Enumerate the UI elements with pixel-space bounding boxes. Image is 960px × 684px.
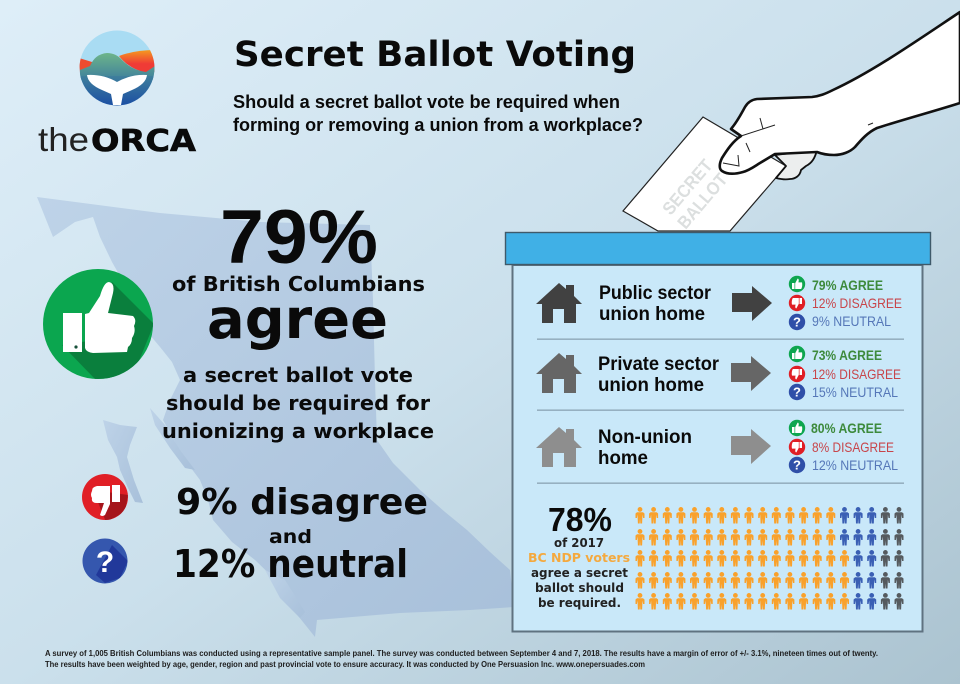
ballot box lid — [506, 232, 930, 264]
label: union home — [598, 375, 704, 396]
label: home — [598, 448, 648, 469]
subtitle question: forming or removing a union from a workplace? — [233, 115, 643, 135]
row: public sector union home — [536, 276, 902, 330]
row: private sector union home — [536, 346, 901, 400]
arrow — [731, 356, 771, 391]
secret ballot statement — [162, 363, 434, 443]
title: Secret Ballot Voting — [234, 35, 636, 75]
logo emblem — [79, 30, 155, 106]
logo: the ORCA — [38, 30, 197, 159]
agree: agree — [207, 287, 388, 351]
subtitle question: Should a secret ballot vote be required when — [233, 92, 620, 112]
secret ballot statement: should be required for — [166, 391, 430, 415]
disagree stat: 9% disagree — [176, 482, 428, 523]
neutral stat: 12% neutral — [173, 542, 408, 586]
footnote: The results have been weighted by age, gender, region and past provincial vote to ensure accuracy. It was conducted by One Persuasion Inc. www.onepersuades.com — [45, 660, 645, 669]
results: 9% NEUTRAL — [812, 313, 891, 329]
results: 80% AGREE — [811, 420, 882, 436]
ballot paper text — [658, 155, 731, 233]
arm and palm — [720, 12, 960, 174]
results: 73% AGREE — [812, 347, 882, 363]
label — [599, 283, 712, 325]
secret ballot statement: a secret ballot vote — [183, 363, 413, 387]
results: 8% DISAGREE — [812, 439, 894, 455]
label: Private sector — [598, 354, 720, 375]
results — [789, 420, 898, 473]
gray people — [881, 507, 904, 610]
and: and — [269, 526, 312, 548]
big percentage: 79% — [220, 195, 378, 280]
results: 15% NEUTRAL — [812, 384, 898, 400]
thumbs up icon — [43, 269, 154, 379]
ballot paper text: SECRET — [658, 155, 716, 219]
finger and thumb details — [723, 118, 873, 166]
ballot paper — [623, 117, 786, 233]
NDP voters stat: ballot should — [535, 580, 624, 595]
row: non-union home — [536, 420, 898, 473]
blue people — [840, 507, 876, 610]
lower fingers — [775, 150, 817, 179]
logo: the ORCA: ORCA — [91, 124, 197, 159]
icon: house — [536, 427, 582, 467]
footnote — [45, 649, 878, 669]
results: 12% NEUTRAL — [812, 457, 898, 473]
icon: house — [536, 353, 582, 393]
question mark icon: ? — [96, 546, 114, 579]
results: 12% DISAGREE — [812, 295, 902, 311]
label — [598, 354, 720, 396]
ballot box body — [512, 265, 922, 632]
secret ballot statement: unionizing a workplace — [162, 419, 434, 443]
NDP voters stat: BC NDP voters — [528, 550, 630, 565]
thumbs down icon — [82, 474, 128, 522]
label: Public sector — [599, 283, 712, 304]
footnote: A survey of 1,005 British Columbians was conducted using a representative sample panel. The survey was conducted between September 4 and 7, 2018. The results have a margin of error of +/- 3.1%, nineteen times out of twenty. — [45, 649, 878, 658]
results — [789, 346, 901, 400]
map of British Columbia — [37, 197, 514, 637]
label — [598, 427, 692, 469]
label: Non-union — [598, 427, 692, 448]
orange people — [636, 507, 849, 610]
NDP voters stat: 78% — [548, 501, 612, 538]
pictogram: 78 of 100 people — [636, 507, 904, 610]
NDP voters stat — [528, 501, 630, 610]
ballot paper text: BALLOT — [673, 169, 731, 233]
subtitle question — [233, 92, 643, 135]
results: 79% AGREE — [812, 277, 883, 293]
hand holding ballot — [720, 12, 960, 179]
icon: house — [536, 283, 582, 323]
NDP voters stat: agree a secret — [531, 565, 628, 580]
of British Columbians: of British Columbians — [172, 272, 425, 296]
NDP voters stat: be required. — [538, 595, 621, 610]
question mark icon — [82, 538, 128, 584]
NDP voters stat: of 2017 — [554, 535, 604, 550]
results: 12% DISAGREE — [812, 366, 901, 382]
arrow — [731, 429, 771, 464]
results — [789, 276, 902, 330]
logo wordmark: the — [38, 121, 89, 158]
label: union home — [599, 304, 705, 325]
arrow — [732, 286, 772, 321]
